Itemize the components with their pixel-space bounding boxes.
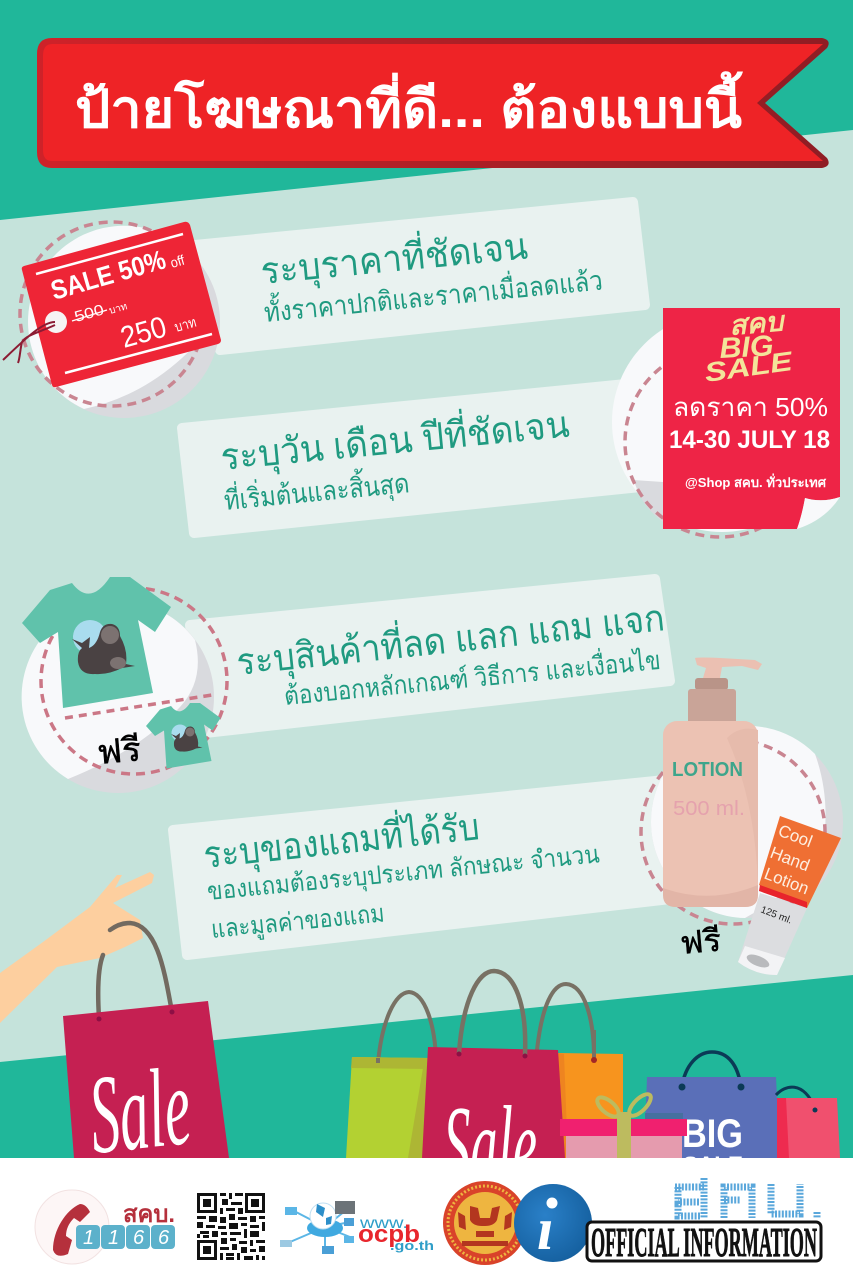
poster text: 14-30 JULY 18 — [669, 426, 830, 454]
price heading: ระบุราคาที่ชัดเจน — [258, 219, 530, 294]
poster text: @Shop สคบ. ทั่วประเทศ — [685, 473, 827, 490]
tag text: off — [168, 252, 186, 271]
free label: ฟรี — [679, 923, 722, 961]
tag text: บาท — [173, 314, 198, 335]
logo: ocpb website: .go.th — [390, 1238, 434, 1253]
panel: clear price — [195, 202, 645, 350]
QR code — [197, 1193, 265, 1260]
footer — [0, 1158, 853, 1280]
gift box — [560, 1091, 687, 1158]
small t-shirt — [146, 703, 220, 768]
poster logo: BIG — [719, 330, 774, 365]
poster logo: สคบ — [728, 306, 787, 341]
pink bag — [776, 1087, 840, 1158]
hand lotion tube: Hand — [768, 843, 812, 875]
poster logo: SALE — [703, 346, 795, 388]
lotion bottle: LOTION — [672, 759, 743, 781]
orange bag — [537, 984, 623, 1158]
gifts description line 1: ของแถมต้องระบุประเภท ลักษณะ จำนวน — [206, 840, 601, 907]
hand lotion tube — [738, 816, 841, 975]
icon: hand holding bag: Sale — [84, 1044, 196, 1178]
dotted agency mark — [675, 1178, 817, 1218]
title text: ป้ายโฆษณาที่ดี... ต้องแบบนี้ — [75, 71, 743, 139]
logo: ocpb website: www. — [359, 1215, 408, 1232]
blue bag: BIG — [682, 1112, 743, 1156]
blue bag — [644, 1052, 780, 1177]
hand lotion tube: 125 ml. — [759, 905, 793, 927]
dates heading: ระบุวัน เดือน ปีที่ชัดเจน — [218, 398, 571, 480]
logo: hotline 1166: 6 — [158, 1227, 170, 1249]
logo: hotline 1166 — [35, 1190, 175, 1264]
logo: official information — [587, 1178, 821, 1265]
gifts heading: ระบุของแถมที่ได้รับ — [201, 800, 482, 878]
goods heading: ระบุสินค้าที่ลด แลก แถม แจก — [234, 591, 667, 685]
icon: lotion bottle and tube — [641, 658, 843, 975]
icon: sale poster — [612, 306, 840, 537]
logo: consumer protection seal — [443, 1181, 527, 1265]
panel: free gifts — [173, 780, 679, 955]
icon: shopping bags and gift — [346, 971, 840, 1208]
price description: ทั้งราคาปกติและราคาเมื่อลดแล้ว — [262, 261, 604, 328]
sale bag — [63, 1001, 229, 1158]
icon: sale price tag — [3, 222, 221, 418]
goods description: ต้องบอกหลักเกณฑ์ วิธีการ และเงื่อนไข — [282, 642, 662, 711]
logo: hotline 1166: สคบ. — [123, 1201, 175, 1228]
lotion bottle — [663, 658, 762, 907]
hand lotion tube: Cool — [776, 821, 815, 851]
poster logo — [703, 306, 795, 388]
large t-shirt — [22, 577, 171, 708]
icon: info circle: ı — [537, 1196, 554, 1262]
icon: t-shirt free gift — [22, 577, 227, 793]
poster text — [669, 392, 830, 490]
tag text: SALE 50% — [47, 244, 169, 306]
tag text: 250 — [117, 311, 170, 355]
free label: ฟรี — [95, 730, 142, 771]
logo: hotline 1166: 6 — [133, 1227, 145, 1249]
icon: hand holding bag — [0, 872, 229, 1178]
lotion bottle: 500 ml. — [673, 798, 745, 820]
dates description: ที่เริ่มต้นและสิ้นสุด — [222, 463, 411, 518]
tag text: บาท — [108, 301, 129, 317]
logo: ocpb website: ocpb — [358, 1221, 420, 1248]
poster text: ลดราคา 50% — [673, 392, 828, 422]
icon: info circle — [514, 1184, 592, 1262]
tag text: 500 — [73, 301, 106, 326]
blue bag: SALE — [683, 1152, 743, 1177]
tag text — [47, 244, 198, 355]
gifts description line 2: และมูลค่าของแถม — [210, 899, 386, 945]
green bag — [346, 992, 436, 1158]
logo: hotline 1166: 1 — [83, 1227, 94, 1249]
title banner — [37, 38, 829, 168]
logo: hotline 1166: 1 — [108, 1227, 119, 1249]
hand lotion tube: Lotion — [762, 864, 812, 898]
panel: discounted goods — [190, 579, 670, 733]
crimson bag: Sale — [443, 1084, 537, 1208]
panel: clear dates — [182, 383, 650, 533]
crimson bag — [422, 971, 565, 1208]
logo: ocpb website — [280, 1201, 434, 1254]
